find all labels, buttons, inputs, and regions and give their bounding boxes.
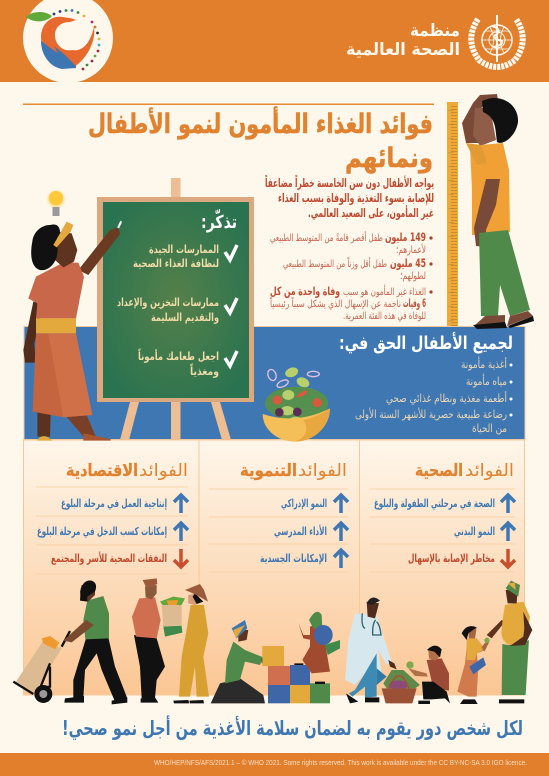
rights list: رضاعة طبيعية حصرية للأشهر الستة الأولى <box>355 407 507 421</box>
title <box>23 104 434 174</box>
developmental heading <box>240 461 347 481</box>
economic heading: الفوائد <box>139 461 188 481</box>
grocery bag and money <box>160 597 185 637</box>
logo: food safety apple and hands <box>23 0 113 83</box>
statistics list: وفاة واحدة من كل <box>270 284 340 299</box>
icon: salad bowl <box>263 366 330 442</box>
rights list: من الحياة <box>472 422 507 435</box>
board item 1: الممارسات الجيدة <box>149 243 219 256</box>
panel: developmental benefits <box>199 440 360 695</box>
height ruler <box>447 102 458 327</box>
board item 3 <box>138 348 237 378</box>
board item 2: ممارسات التخزين والإعداد <box>117 296 219 309</box>
board item 2: والتقديم السليمة <box>151 311 219 324</box>
board item 3: ومغذياً <box>190 363 219 378</box>
board heading: تذكّر: <box>201 209 237 233</box>
rights list <box>355 356 512 435</box>
basket of vegetables <box>382 661 420 703</box>
intro text block: للإصابة بسوء التغذية والوفاة بسبب الغذاء <box>278 191 434 206</box>
doctor <box>345 598 397 703</box>
statistics list: لأعمارهم؛ <box>396 243 426 256</box>
board item 1 <box>133 243 237 270</box>
WHO emblem <box>471 15 523 67</box>
statistics list: الغذاء غير المأمون هو سبب <box>343 284 426 298</box>
economic heading: الاقتصادية <box>66 461 138 481</box>
economic heading <box>66 461 188 481</box>
building blocks <box>262 646 330 703</box>
easel chalkboard <box>97 178 254 440</box>
left group of people <box>13 578 272 704</box>
health heading: الصحية <box>415 461 463 481</box>
board item 3: اجعل طعامك مأموناً <box>138 348 219 363</box>
WHO name <box>346 21 460 60</box>
intro text block <box>265 174 434 221</box>
WHO name: الصحة العالمية <box>346 40 460 60</box>
right group of people <box>294 581 532 704</box>
title: فوائد الغذاء المأمون لنمو الأطفال <box>88 106 433 140</box>
intro text block: يواجه الأطفال دون سن الخامسة خطراً مضاعفاً <box>265 174 434 191</box>
title: ونمائهم <box>345 143 433 174</box>
developmental heading: التنموية <box>240 461 297 481</box>
statistics list: ناجمة عن الإسهال الذي يشكل سبباً رئيسياً <box>270 296 401 310</box>
rights list: مياه مأمونة <box>466 373 507 388</box>
health benefit rows: النمو البدني <box>454 525 495 538</box>
health benefit rows: مخاطر الإصابة بالإسهال <box>408 552 495 565</box>
developmental benefit rows: الإمكانات الجسدية <box>260 552 327 565</box>
teacher figure <box>23 221 122 441</box>
pregnant woman <box>487 581 532 703</box>
intro text block: غير المأمون، على الصعيد العالمي. <box>308 205 434 221</box>
statistics list: طفل أقل وزناً من المتوسط الطبيعي <box>283 256 387 270</box>
header band <box>0 0 549 83</box>
girl with book <box>457 626 490 704</box>
board item 1: لنظافة الغذاء الصحية <box>133 257 219 270</box>
economic benefit rows: إنتاجية العمل في مرحلة البلوغ <box>61 497 167 510</box>
panel: health benefits <box>360 440 524 695</box>
developmental heading: الفوائد <box>298 461 347 481</box>
rights list: أطعمة مغذية ونظام غذائي صحي <box>386 391 507 405</box>
man with groceries <box>132 578 165 703</box>
statistics list: طفل أقصر قامةً من المتوسط الطبيعي <box>270 231 383 244</box>
blue rights band <box>24 326 525 440</box>
developmental benefit rows: النمو الإدراكي <box>281 497 327 510</box>
developmental benefit rows: الأداء المدرسي <box>274 524 327 538</box>
statistics list <box>270 230 433 322</box>
economic benefit rows: النفقات الصحية للأسر والمجتمع <box>51 551 167 565</box>
health heading: الفوائد <box>465 461 514 481</box>
economic benefit rows: إمكانات كسب الدخل في مرحلة البلوغ <box>37 525 167 538</box>
WHO name: منظمة <box>410 21 460 41</box>
cart with oranges <box>13 631 70 703</box>
economic benefit rows <box>37 495 188 567</box>
statistics list: لطولهم؛ <box>400 271 426 282</box>
boy being measured <box>462 94 534 329</box>
child climbing with backpack <box>294 612 340 684</box>
kneeling boy <box>408 646 450 704</box>
developmental benefit rows <box>260 495 348 568</box>
rights list: أغذية مأمونة <box>461 356 507 371</box>
statistics list: 45 مليون <box>390 256 426 271</box>
woman with hat <box>173 584 209 703</box>
statistics list: للوفاة في هذه الفئة العمرية. <box>343 311 426 322</box>
footer band <box>0 753 549 776</box>
man pushing cart <box>63 581 127 704</box>
health benefit rows <box>374 495 515 567</box>
panel: economic benefits <box>24 440 199 695</box>
board item 2 <box>117 296 237 324</box>
statistics list: 6 وفيات <box>403 296 426 311</box>
icon: light bulb <box>45 188 67 216</box>
kneeling woman <box>211 620 272 703</box>
statistics list: 149 مليون <box>385 230 426 245</box>
health heading <box>415 461 514 481</box>
